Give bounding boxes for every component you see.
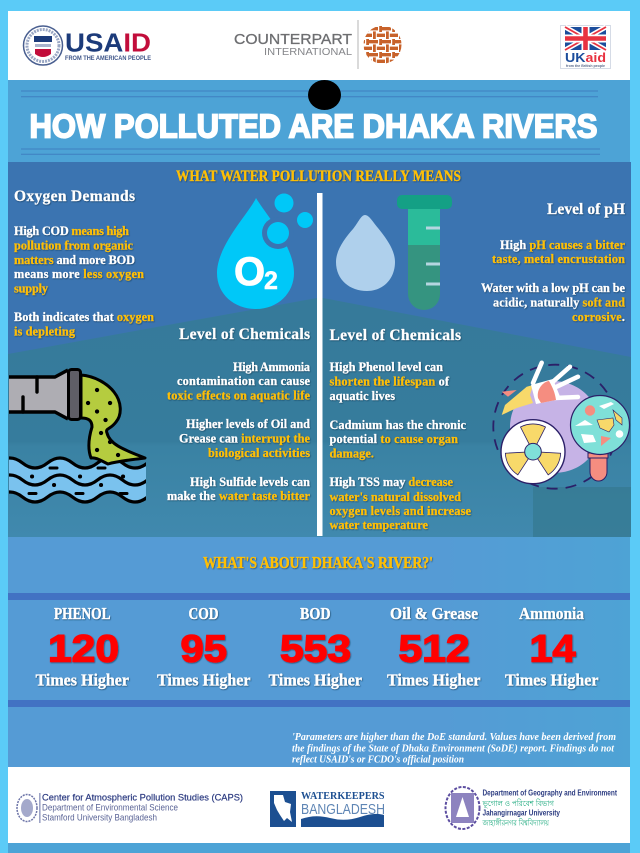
text block: level of pH: Water with a low pH can be [481, 281, 626, 295]
pipe [9, 370, 68, 419]
black circle [308, 80, 341, 110]
text block: oxygen demands: pollution from organic [14, 238, 134, 252]
logo: UK aid: from the British people [566, 64, 605, 68]
text block: level of chemicals left: High Sulfide levels can [190, 475, 310, 489]
section heading: WHAT WATER POLLUTION REALLY MEANS [176, 168, 461, 185]
icon: pale water drop [336, 215, 395, 291]
text block: level of chemicals right: potential to cause organ [330, 432, 458, 446]
logo: Waterkeepers Bangladesh: BANGLADESH [301, 801, 385, 818]
logo: Jahangirnagar University Geography department [446, 787, 617, 829]
text block: level of pH: acidic, naturally soft and [493, 296, 625, 310]
logo: Jahangirnagar University Geography department: জাহাঙ্গীরনগর বিশ্ববিদ্যালয় [482, 818, 549, 828]
text block: level of chemicals right: Level of Chemicals [330, 327, 461, 344]
logo: Waterkeepers Bangladesh: WATERKEEPERS [301, 790, 384, 802]
stat: BOD: BOD [300, 604, 331, 623]
text block: level of chemicals left: Grease can interrupt the [179, 432, 311, 446]
river [0, 458, 148, 502]
text block: level of chemicals left: make the water taste bitter [167, 489, 311, 503]
stat: Ammonia [505, 604, 598, 690]
logo: USAID [24, 26, 151, 65]
icon: oxygen drop: 2 [264, 267, 278, 295]
footer logo band [8, 767, 630, 853]
logo: CAPS: Center for Atmospheric Pollution Studies (CAPS) [42, 793, 243, 804]
logo: CAPS: Stamford University Bangladesh [42, 813, 157, 823]
section heading: WHAT'S ABOUT DHAKA'S RIVER?' [203, 553, 433, 572]
stat: Oil and Grease: Times Higher [387, 671, 480, 690]
logo: UK aid [560, 26, 610, 68]
text block: oxygen demands: is depleting [14, 324, 76, 338]
text block: level of chemicals left: High Ammonia [233, 360, 310, 374]
stat: BOD: Times Higher [268, 671, 362, 690]
stat: Oil and Grease: Oil & Grease [390, 604, 478, 623]
text block: level of chemicals left: toxic effects on aquatic life [167, 388, 311, 402]
text block: oxygen demands: supply [14, 282, 49, 296]
text block: level of chemicals right: oxygen levels and increase [330, 504, 472, 518]
text block: level of pH: Level of pH [547, 201, 625, 218]
text block: level of chemicals left: Level of Chemicals [179, 326, 310, 343]
text block: oxygen demands: means more less oxygen [14, 267, 144, 281]
text block: oxygen demands: Both indicates that oxygen [14, 310, 154, 324]
stat: COD: 95 [180, 629, 227, 671]
footnote: reflect USAID's or FCDO's official position [292, 755, 464, 766]
stat: Phenol: Times Higher [36, 671, 129, 690]
logo: Waterkeepers Bangladesh [270, 790, 385, 827]
stat: Oil and Grease: 512 [398, 629, 470, 671]
text block: level of chemicals right: shorten the lifespan of [330, 374, 450, 388]
text block: level of chemicals right [330, 327, 472, 532]
text block: oxygen demands: Oxygen Demands [14, 188, 135, 205]
stat: Phenol: 120 [48, 629, 119, 671]
stat: Ammonia: 14 [530, 629, 576, 671]
hand [502, 363, 578, 415]
text block: level of pH: corrosive. [572, 310, 625, 324]
logo: CAPS [17, 793, 243, 823]
logo: CAPS: Department of Environmental Science [42, 803, 178, 813]
logo: Counterpart International: COUNTERPART [234, 31, 352, 48]
text block: level of chemicals right: water's natural dissolved [330, 490, 461, 504]
magnifier [570, 396, 630, 481]
text block: level of chemicals right: High TSS may decrease [330, 475, 454, 489]
stat: COD [157, 604, 250, 690]
logo: Counterpart International: INTERNATIONAL [264, 46, 352, 58]
text block: level of pH: taste, metal encrustation [492, 252, 625, 266]
title: HOW POLLUTED ARE DHAKA RIVERS [30, 108, 598, 144]
stat: BOD [268, 604, 362, 690]
footnote [292, 732, 616, 766]
title band [8, 80, 630, 162]
logo: USAID: USAID [65, 28, 151, 58]
logo: Jahangirnagar University Geography department: ভূগোল ও পরিবেশ বিভাগ [482, 799, 555, 808]
text block: level of chemicals left: contamination can cause [177, 374, 311, 388]
stat: Ammonia: Ammonia [519, 604, 584, 623]
stat: Phenol [36, 604, 129, 690]
text block: oxygen demands: High COD means high [14, 224, 129, 238]
header logo band [8, 11, 630, 80]
text block: level of pH: High pH causes a bitter [500, 238, 626, 252]
logo: UK aid: UKaid [565, 50, 606, 65]
panel: what's about Dhaka's river [8, 537, 630, 767]
stat: BOD: 553 [280, 629, 351, 671]
icon: oxygen drop: O [234, 250, 265, 294]
stat: COD: Times Higher [157, 671, 250, 690]
stat: Ammonia: Times Higher [505, 671, 598, 690]
text block: level of chemicals right: water temperature [330, 518, 429, 532]
footnote: the findings of the State of Dhaka Environment (SoDE) report. Findings do not [292, 743, 615, 754]
footnote: 'Parameters are higher than the DoE standard. Values have been derived from [292, 732, 616, 743]
text block: oxygen demands: matters and more BOD [14, 253, 135, 267]
panel: what water pollution really means [0, 162, 631, 537]
icon: discharge pipe and river [0, 370, 148, 502]
sludge [81, 375, 145, 464]
logo: Jahangirnagar University Geography department: Jahangirnagar University [482, 809, 560, 818]
text block: level of chemicals left [167, 326, 311, 503]
stat: COD: COD [188, 604, 219, 623]
stat: Oil and Grease [387, 604, 480, 690]
text block: oxygen demands [14, 188, 154, 338]
text block: level of chemicals right: aquatic lives [330, 389, 395, 403]
radiation symbol [501, 420, 565, 484]
icon: hazardous chemicals illustration [493, 363, 630, 489]
stat: Phenol: PHENOL [54, 604, 110, 623]
text block: level of chemicals left: Higher levels of Oil and [186, 417, 310, 431]
icon: test tube [397, 195, 452, 310]
text block: level of chemicals right: Cadmium has the chronic [330, 418, 467, 432]
logo: Counterpart International [234, 20, 402, 69]
text block: level of chemicals left: biological activities [208, 446, 310, 460]
text block: level of chemicals right: High Phenol level can [330, 360, 443, 374]
text block: level of pH [481, 201, 626, 324]
logo: USAID: FROM THE AMERICAN PEOPLE [65, 55, 151, 62]
text block: level of chemicals right: damage. [330, 446, 374, 460]
icon: oxygen drop [217, 194, 313, 309]
